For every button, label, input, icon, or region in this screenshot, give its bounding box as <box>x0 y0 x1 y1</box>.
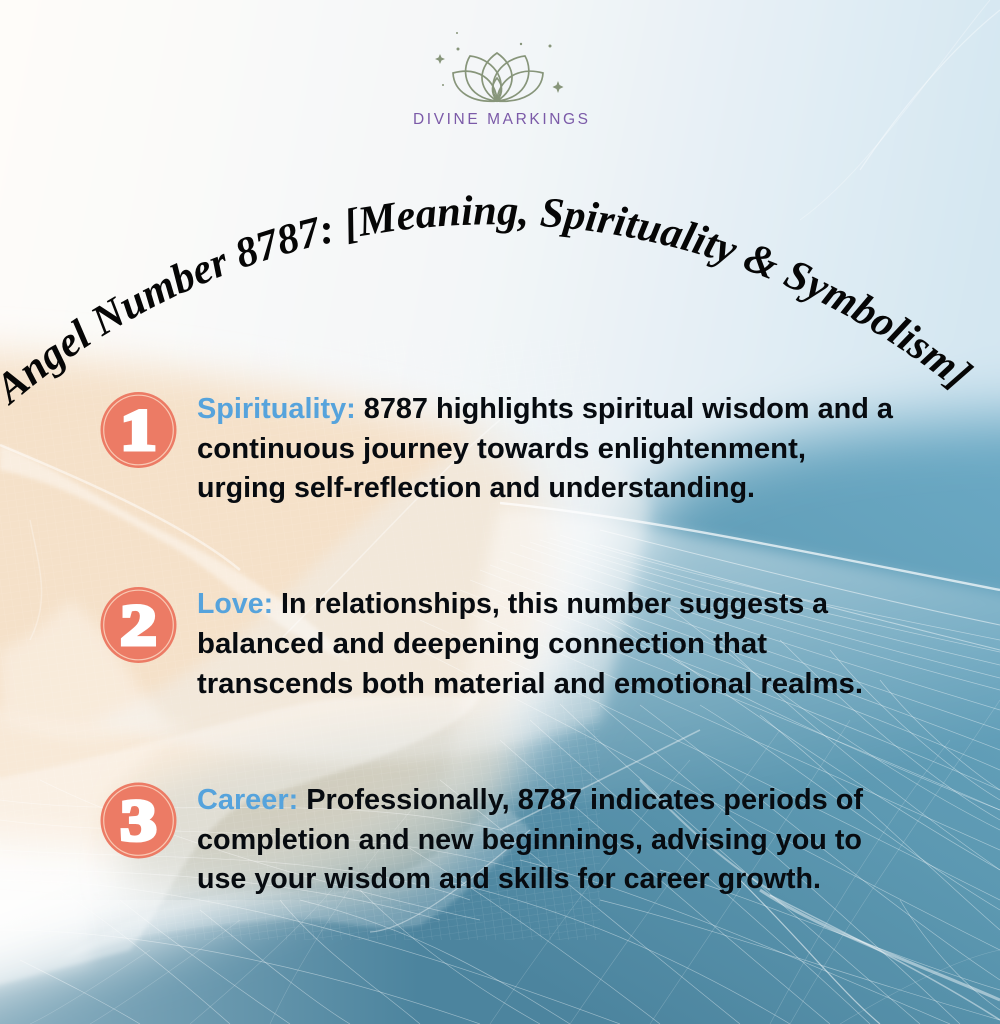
icon: number 1 badge <box>100 392 176 468</box>
text: career: Career: Professionally, 8787 indicates periods of <box>197 784 864 816</box>
left wave veils <box>0 445 350 660</box>
icon: lotus flower <box>453 53 543 101</box>
bottom left pale teal <box>0 900 420 1024</box>
sea mesh lines <box>0 535 1000 1024</box>
text: career <box>197 784 864 895</box>
icon: number 3 badge <box>100 782 176 858</box>
logo: Divine Markings <box>413 32 588 128</box>
title: curved heading: Angel Number 8787: [Meaning, Spirituality & Symbolism] <box>3 195 974 406</box>
text: spirituality: Spirituality: 8787 highlights spiritual wisdom and a <box>197 393 894 425</box>
text: spirituality: continuous journey towards enlightenment, <box>197 433 806 465</box>
point 2: love <box>100 587 863 700</box>
text: career: use your wisdom and skills for career growth. <box>197 863 821 895</box>
lower left bright veil <box>0 705 190 990</box>
icon: number 2 badge <box>100 587 176 663</box>
icon: number 2 badge: 2 <box>120 593 157 658</box>
lower left veil <box>0 695 480 990</box>
crossing mesh lines <box>30 700 1000 1024</box>
point 3: career <box>100 782 864 895</box>
upper veil <box>90 425 650 762</box>
text: spirituality <box>197 393 894 504</box>
left corner veil <box>0 600 170 737</box>
logo wordmark: DIVINE MARKINGS <box>413 111 588 128</box>
sea veil <box>440 508 1000 800</box>
text: love: balanced and deepening connection that <box>197 628 768 660</box>
text: love: transcends both material and emotional realms. <box>197 668 863 700</box>
icon: number 1 badge: 1 <box>120 398 157 463</box>
text: spirituality: urging self-reflection and understanding. <box>197 472 755 504</box>
grey tan mesh area <box>120 720 513 897</box>
warm sand band <box>0 350 550 849</box>
icon: number 3 badge: 3 <box>120 789 157 853</box>
lower veil edge <box>60 800 530 960</box>
icon: sparkles <box>435 32 564 93</box>
sand mesh <box>0 340 600 940</box>
point 1: spirituality <box>100 392 894 504</box>
text: love <box>197 588 863 700</box>
text: career: completion and new beginnings, advising you to <box>197 824 862 856</box>
text: love: Love: In relationships, this number suggests a <box>197 588 829 620</box>
